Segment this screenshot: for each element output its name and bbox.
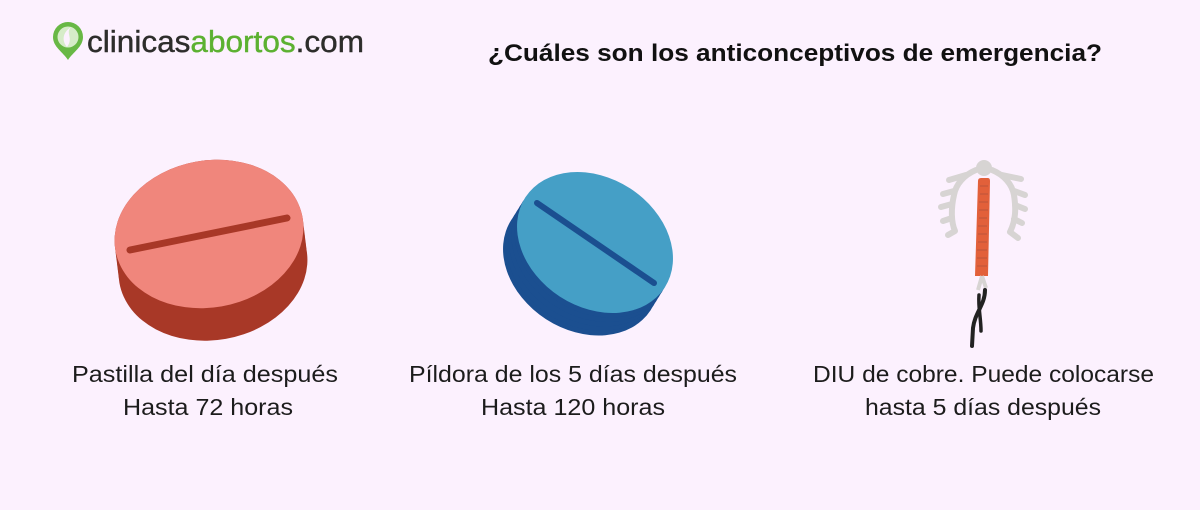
IUD threads	[978, 276, 986, 290]
icon: red pill	[103, 145, 319, 355]
caption: píldora	[409, 361, 737, 420]
caption: pastilla	[72, 361, 338, 420]
caption: DIU: DIU de cobre. Puede colocarse	[813, 361, 1154, 387]
title: ¿Cuáles son los anticonceptivos de emergencia?	[488, 40, 1102, 67]
icon: map pin	[53, 22, 83, 60]
panel: pastilla del día después	[72, 145, 338, 420]
IUD head	[976, 160, 992, 176]
logo	[53, 22, 364, 60]
IUD arms	[941, 170, 1025, 238]
caption: píldora: Hasta 120 horas	[481, 394, 665, 420]
caption: DIU: hasta 5 días después	[865, 394, 1101, 420]
icon: copper IUD	[941, 160, 1025, 346]
caption: pastilla: Pastilla del día después	[72, 361, 338, 387]
caption: píldora: Píldora de los 5 días después	[409, 361, 737, 387]
caption: pastilla: Hasta 72 horas	[123, 394, 293, 420]
icon: blue pill	[476, 143, 700, 364]
logo wordmark: clinicasabortos.com	[87, 24, 364, 59]
panel: píldora de los 5 días después	[409, 143, 737, 420]
IUD copper stem	[975, 178, 990, 276]
panel: DIU de cobre	[813, 160, 1154, 420]
caption: DIU	[813, 361, 1154, 420]
